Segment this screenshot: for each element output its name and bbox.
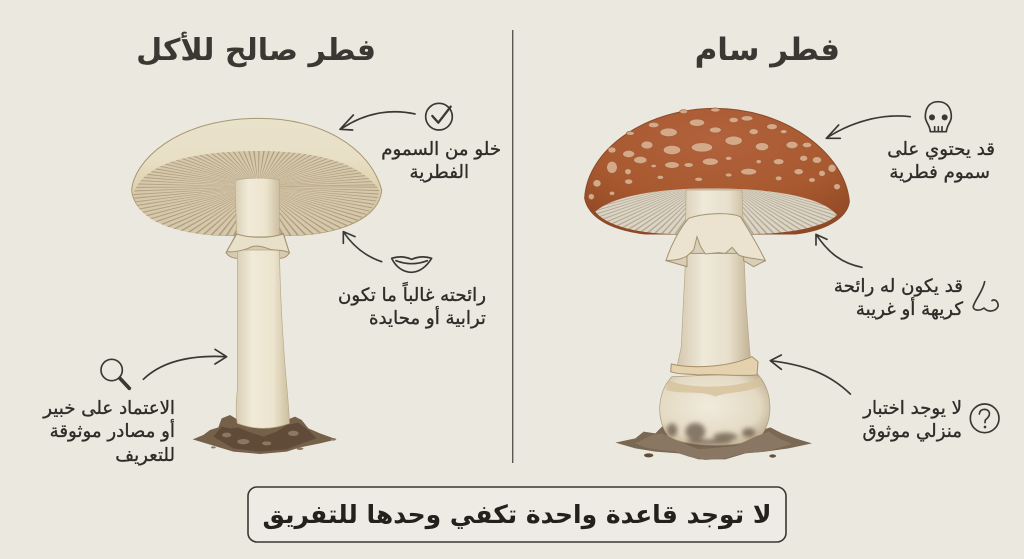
text: may contain toxins: سموم فطرية: [889, 162, 990, 183]
illustration: edible mushroom: [130, 118, 387, 454]
icon: mouth: [392, 257, 432, 272]
soil: [615, 427, 812, 459]
arrow to gills: [343, 232, 382, 262]
cap: [132, 118, 382, 236]
icon: check: [426, 103, 452, 130]
text: may contain toxins: [887, 139, 995, 183]
skirt ring back: [666, 237, 765, 267]
gills: [596, 188, 837, 234]
bulb shading: [666, 377, 763, 397]
warts: [588, 108, 840, 200]
stones: [644, 453, 776, 458]
text: smell: رائحته غالباً ما تكون: [338, 281, 486, 306]
gills: [134, 151, 380, 236]
text: free of toxins: [381, 139, 501, 183]
text: expert: للتعريف: [115, 445, 175, 466]
text: bad smell: كريهة أو غريبة: [856, 297, 963, 320]
stem: [677, 190, 751, 367]
stem: [236, 250, 289, 428]
text: no home test: [862, 398, 962, 442]
illustration: poisonous mushroom: [585, 108, 849, 460]
icon: magnifier: [101, 359, 129, 388]
callout: bottom note: لا توجد قاعدة واحدة تكفي وحدها للتفريق: [263, 500, 771, 530]
bulb soil stains: [667, 423, 755, 445]
text: bad smell: قد يكون له رائحة: [834, 276, 963, 297]
cap: [585, 108, 849, 234]
heading: edible: فطر صالح للأكل: [136, 31, 376, 68]
text: expert: [42, 398, 175, 466]
ring back: [226, 233, 289, 258]
text: expert: الاعتماد على خبير: [42, 398, 175, 419]
soil crumbs: [211, 431, 336, 450]
text: no home test: لا يوجد اختبار: [862, 398, 962, 419]
callout: bottom note: [248, 487, 786, 542]
arrow to bulb: [770, 355, 850, 394]
skirt ring front: [666, 214, 765, 261]
text: free of toxins: الفطرية: [409, 162, 469, 183]
soil front: [213, 423, 317, 452]
text: smell: [338, 281, 486, 329]
soil back: [193, 415, 337, 454]
text: no home test: منزلي موثوق: [863, 421, 962, 442]
arrow to stem: [143, 349, 227, 379]
text: expert: أو مصادر موثوقة: [50, 419, 175, 442]
divider: [512, 30, 513, 463]
text: smell: ترابية أو محايدة: [369, 306, 486, 329]
arrow to cap: [340, 112, 415, 130]
heading: poisonous: فطر سام: [695, 32, 840, 68]
arrow to cap: [826, 116, 910, 138]
upper stem: [235, 178, 279, 237]
panel: edible mushroom: [42, 31, 501, 466]
icon: nose: [973, 282, 998, 311]
panel: poisonous mushroom: [585, 32, 999, 460]
text: bad smell: [834, 276, 963, 320]
text: may contain toxins: قد يحتوي على: [887, 139, 995, 160]
icon: skull: [925, 102, 951, 132]
ring front: [227, 234, 289, 253]
soil clumps: [635, 432, 792, 460]
arrow to ring: [816, 234, 862, 267]
collar: [671, 357, 758, 375]
icon: question: [970, 404, 999, 433]
bulb: [660, 373, 770, 445]
text: free of toxins: خلو من السموم: [381, 139, 501, 160]
